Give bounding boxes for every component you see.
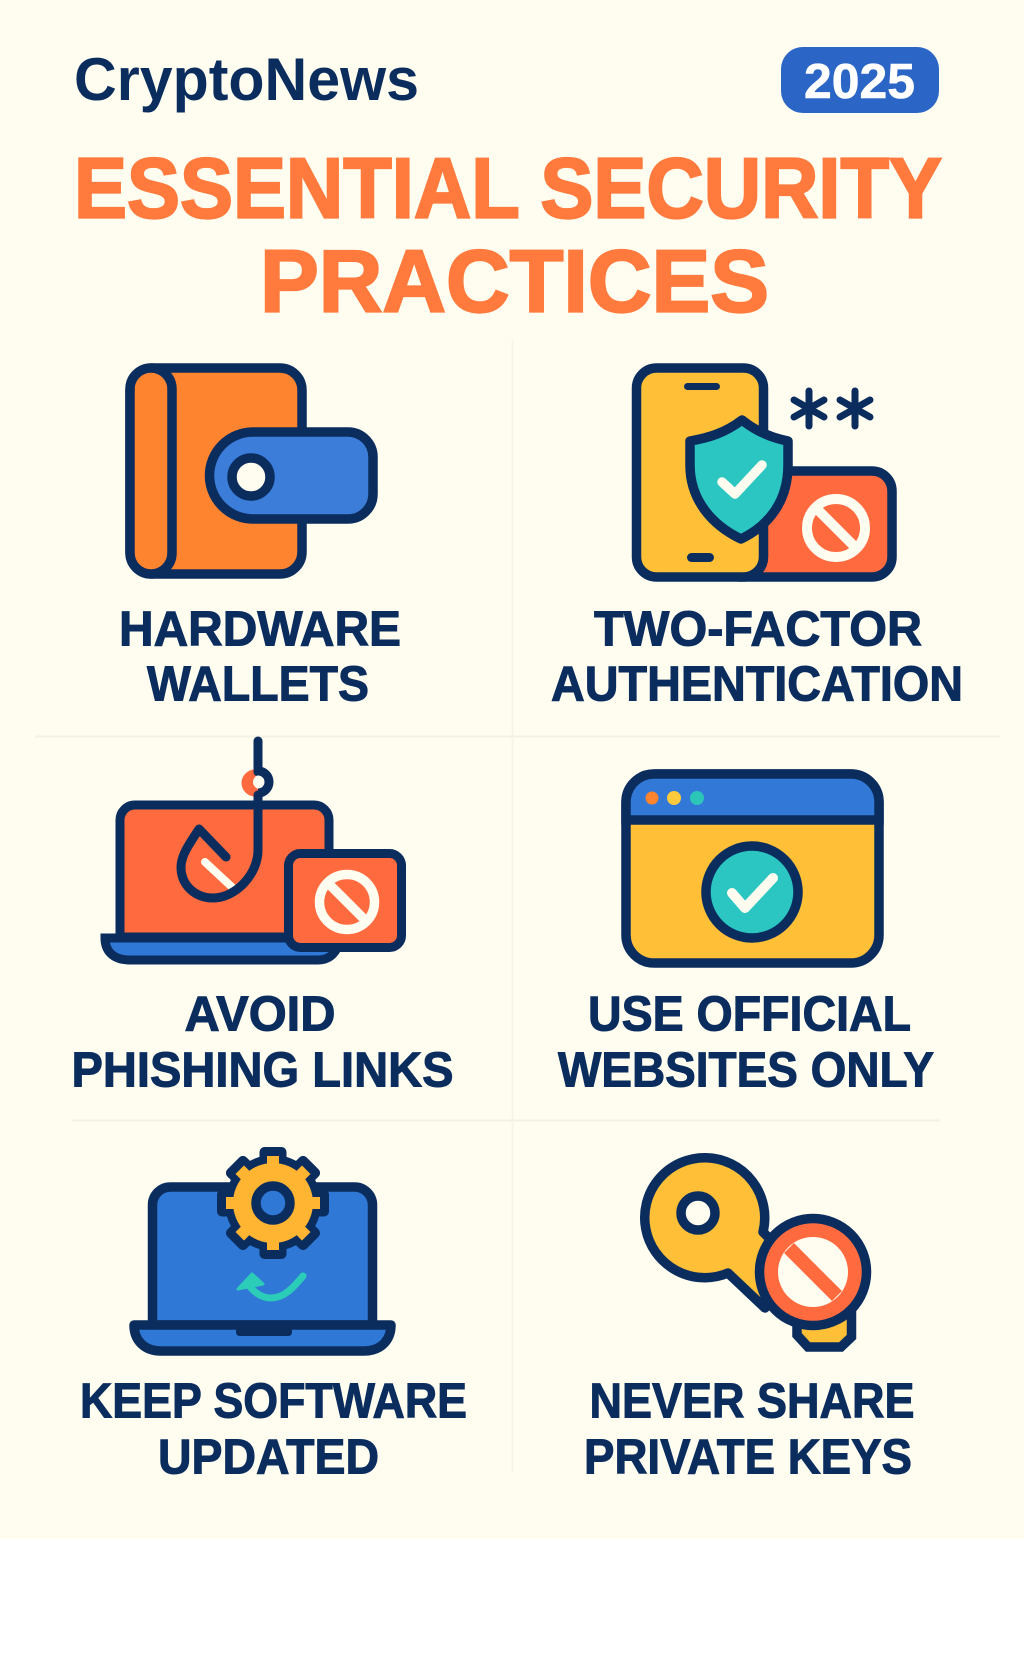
label: avoid phishing links: [72, 988, 454, 1098]
icon: browser window with check: [626, 774, 879, 963]
title: ESSENTIAL SECURITY: [74, 142, 942, 236]
label: keep software updated: [80, 1374, 467, 1484]
label: hardware wallets: HARDWARE: [119, 602, 401, 656]
title: PRACTICES: [260, 232, 769, 330]
label: two-factor authentication: [551, 602, 963, 712]
title: [74, 142, 942, 330]
label: avoid phishing links: PHISHING LINKS: [72, 1044, 454, 1098]
logo: CryptoNews: CryptoNews: [74, 46, 419, 113]
label: keep software updated: KEEP SOFTWARE: [80, 1374, 467, 1428]
label: two-factor authentication: TWO-FACTOR: [594, 602, 922, 656]
label: use official websites only: WEBSITES ONLY: [558, 1044, 934, 1098]
header: [74, 46, 939, 113]
label: keep software updated: UPDATED: [158, 1430, 379, 1484]
icon: key with prohibition sign: [645, 1158, 866, 1347]
icon: wallet: [130, 368, 373, 574]
label: never share private keys: PRIVATE KEYS: [584, 1430, 912, 1484]
panel: hardware wallets: [119, 368, 401, 712]
label: hardware wallets: [119, 602, 401, 712]
panel: keep software updated: [80, 1147, 467, 1484]
label: hardware wallets: WALLETS: [147, 658, 369, 712]
icon: phone with shield: [636, 368, 892, 577]
label: avoid phishing links: AVOID: [184, 988, 336, 1042]
badge: 2025: [781, 47, 939, 113]
icon: laptop with gear: [134, 1147, 391, 1351]
label: two-factor authentication: AUTHENTICATION: [551, 658, 963, 712]
badge: 2025: 2025: [804, 55, 915, 109]
icon: laptop with fishing hook: [105, 741, 402, 960]
panel: two-factor authentication: [551, 368, 963, 712]
panel: avoid phishing links: [72, 741, 454, 1098]
label: never share private keys: NEVER SHARE: [590, 1374, 914, 1428]
label: use official websites only: [558, 988, 934, 1098]
label: never share private keys: [584, 1374, 914, 1484]
label: use official websites only: USE OFFICIAL: [588, 988, 911, 1042]
panel: never share private keys: [584, 1158, 914, 1484]
panel: use official websites only: [558, 774, 934, 1098]
